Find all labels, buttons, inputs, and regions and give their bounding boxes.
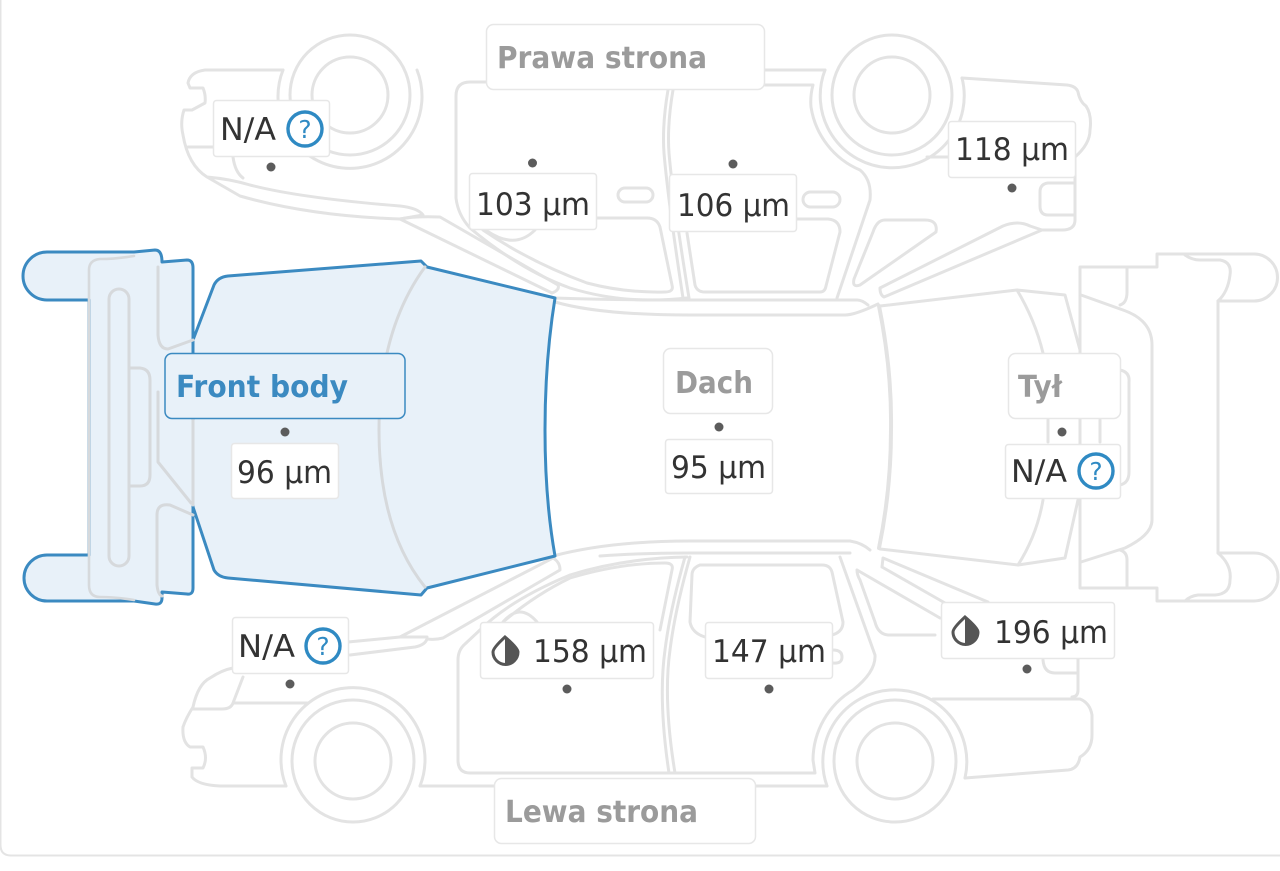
reading: 147 µm: 147 µm xyxy=(712,634,826,670)
roof and rear glass xyxy=(879,290,1080,565)
rear quarter window left xyxy=(857,570,940,635)
reading: 147 µm xyxy=(706,622,832,694)
icon: half drop xyxy=(953,617,978,644)
reading: 103 µm: 103 µm xyxy=(476,187,590,223)
reading: 95 µm: 95 µm xyxy=(671,450,766,486)
reading: front left N/A xyxy=(232,618,348,688)
icon: half drop xyxy=(493,637,518,664)
windshield strip right xyxy=(400,217,558,293)
rear pillar strip right xyxy=(880,223,1042,297)
door sill left xyxy=(420,784,827,788)
door pillar right xyxy=(664,90,689,298)
icon: question mark: ? xyxy=(316,632,330,661)
rear window arc xyxy=(879,306,891,548)
car bottom view: left side xyxy=(183,541,1092,822)
label: Tył xyxy=(1008,354,1120,418)
label: Front body: Front body xyxy=(176,370,348,405)
rear body right xyxy=(927,78,1090,230)
label: Tył: Tył xyxy=(1018,370,1063,405)
car top view: right side xyxy=(182,35,1090,315)
reading: 96 µm xyxy=(232,428,338,498)
reading: rear N/A xyxy=(1006,428,1120,498)
front door right xyxy=(456,82,687,300)
label: Front body xyxy=(165,354,405,418)
front bumper xyxy=(23,250,193,604)
reading: 158 µm xyxy=(480,622,654,694)
reading: 196 µm: 196 µm xyxy=(994,615,1108,651)
icon: question mark: ? xyxy=(1089,457,1103,486)
reading: 158 µm: 158 µm xyxy=(533,634,647,670)
reading: rear N/A: N/A xyxy=(1011,454,1067,490)
icon: question mark: ? xyxy=(298,115,312,144)
front wheel left xyxy=(281,688,425,822)
rear wheel right xyxy=(820,35,964,168)
rear bumper xyxy=(1048,254,1278,601)
rear quarter window right xyxy=(854,220,936,286)
reading: 118 µm xyxy=(948,122,1076,192)
label: Dach: Dach xyxy=(675,366,753,401)
label: Dach xyxy=(664,348,772,414)
rear door left xyxy=(690,565,843,637)
reading: 96 µm: 96 µm xyxy=(237,455,332,491)
reading: 106 µm: 106 µm xyxy=(677,188,790,224)
label: Prawa strona: Prawa strona xyxy=(497,41,707,76)
label: Prawa strona xyxy=(486,24,764,90)
rear door right xyxy=(765,70,870,298)
reading: 106 µm xyxy=(670,160,796,232)
reading: 196 µm xyxy=(942,602,1114,674)
rear body left xyxy=(933,655,1092,778)
front door left xyxy=(458,630,815,773)
front bumper and hood edge right xyxy=(182,70,423,219)
label: Lewa strona xyxy=(494,778,756,844)
front wheel right xyxy=(278,35,422,168)
roof edge left xyxy=(553,541,870,556)
rear pillar strip left xyxy=(882,558,988,603)
reading: front right N/A: N/A xyxy=(220,112,276,148)
reading: 118 µm: 118 µm xyxy=(955,132,1069,168)
reading: front right N/A xyxy=(214,100,330,172)
inner panel lines xyxy=(379,267,425,587)
door pillar left xyxy=(662,557,690,773)
reading: 103 µm xyxy=(470,158,596,230)
label: Lewa strona: Lewa strona xyxy=(505,795,698,830)
front body highlighted panel xyxy=(23,250,555,604)
rear wheel left xyxy=(823,690,967,822)
sill and roof edge right xyxy=(555,298,878,315)
rear deck lines xyxy=(880,290,1080,565)
reading: front left N/A: N/A xyxy=(238,629,295,665)
front bumper and hood edge left xyxy=(183,668,307,786)
reading: 95 µm xyxy=(666,422,772,494)
hood xyxy=(193,261,555,595)
